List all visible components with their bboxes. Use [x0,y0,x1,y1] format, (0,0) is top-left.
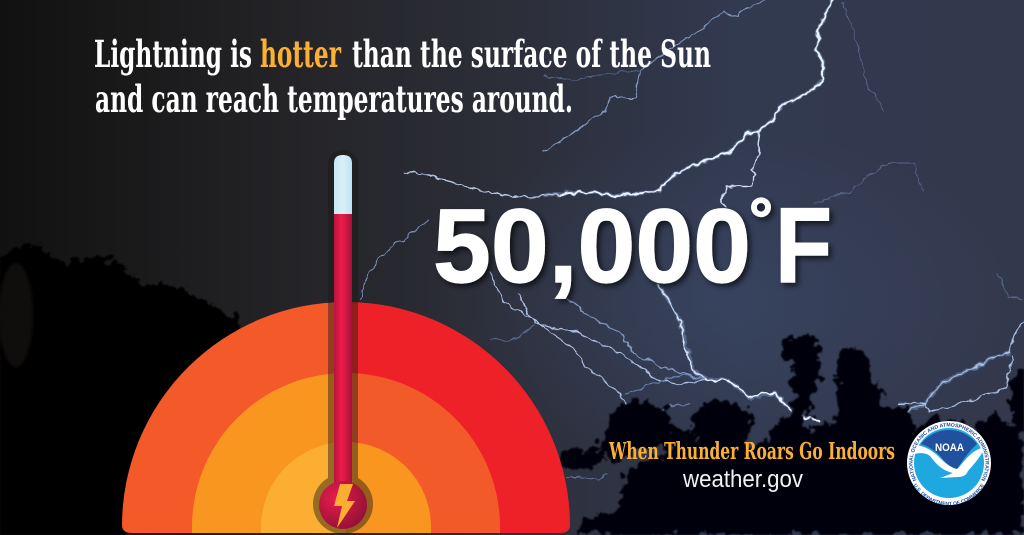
heading line 2: and can reach temperatures around. [95,77,573,121]
degree sign: ° [749,186,773,253]
thermometer [313,150,373,534]
icon: NOAA logo [907,421,991,506]
bolt left extension [405,172,560,197]
thermometer red column [334,214,352,489]
slogan: When Thunder Roars Go Indoors [608,438,895,465]
lightning lower strands [490,272,706,418]
bolt branch downward [720,130,759,206]
lightning left of number [359,220,429,300]
logo white bird [914,445,985,478]
left tree silhouette [0,245,238,535]
gauge left half [122,302,346,533]
lightning glow [545,0,1009,418]
upper left branch [545,0,767,150]
lightning right strands [895,320,1023,418]
thermometer bulb [319,481,367,529]
logo dark blue top [921,430,977,469]
number: 50,000 [433,188,751,305]
big temperature value [433,185,832,305]
low strand beside gauge [567,474,607,480]
semicircle heat gauge [122,302,570,533]
logo ring text bottom: U.S. DEPARTMENT OF COMMERCE [914,483,984,506]
main upper bolt [560,0,831,195]
logo name: NOAA [935,442,964,454]
logo ring text top: NATIONAL OCEANIC AND ATMOSPHERIC ADMINISTRATION [908,422,990,482]
lightning central bright strand [706,379,820,420]
faint right branches [545,3,1023,299]
thermometer glass [334,155,352,214]
faint strand near trees [660,403,690,412]
heading line 1 start: Lightning is [94,32,252,76]
heading [94,32,711,121]
heading highlighted word: hotter [260,32,341,76]
website: weather.gov [682,466,803,493]
lightning bolts [359,0,1023,480]
heading line 1 end: than the surface of the Sun [352,32,711,76]
icon: lightning bolt [334,484,355,528]
thermometer halo [313,150,373,534]
unit: F [775,185,832,305]
gauge right half [346,302,570,533]
right tree silhouette [560,335,1024,535]
